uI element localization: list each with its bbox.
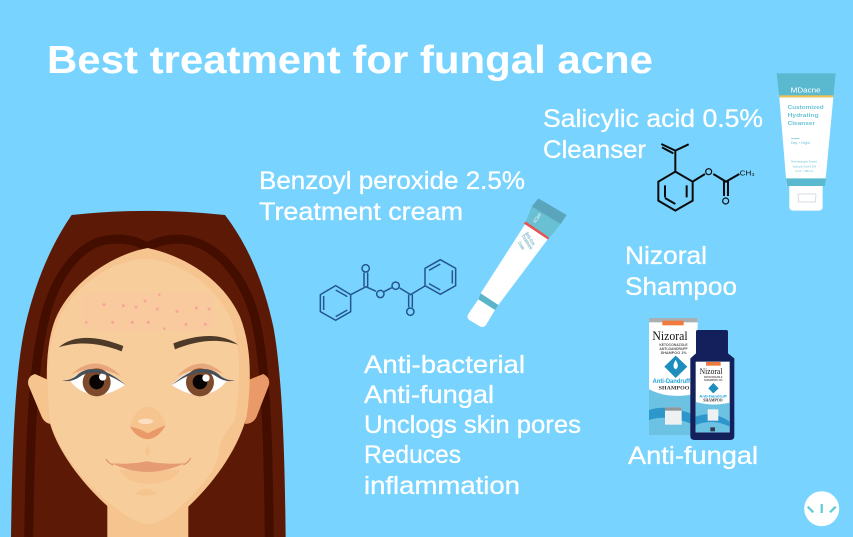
product: benzoyl peroxide cream tube (467, 198, 567, 327)
title: Best treatment for fungal acne (47, 39, 653, 82)
eye: right (172, 363, 235, 396)
shampoo bottle: SHAMPOO (703, 398, 723, 402)
shampoo box: SHAMPOO 1% (661, 351, 687, 355)
eye: left (62, 363, 126, 396)
molecule: benzoyl peroxide (320, 260, 456, 320)
logo badge (804, 491, 839, 526)
heading: nizoral shampoo (625, 242, 737, 301)
shampoo box: SHAMPOO (659, 385, 690, 391)
heading: benzoyl peroxide: Benzoyl peroxide 2.5% (259, 167, 525, 195)
molecule: salicylic acid: CH₃ (740, 169, 755, 178)
product: MDacne cleanser tube: Hydrating (788, 113, 819, 119)
eyebrow: left (59, 338, 123, 351)
heading: nizoral shampoo: Shampoo (625, 273, 737, 301)
benefits list: benzoyl peroxide: Anti-fungal (364, 381, 494, 409)
neck (107, 500, 188, 537)
benefits list: benzoyl peroxide (364, 351, 581, 500)
illustration: woman's face with forehead acne (11, 211, 286, 537)
product: MDacne cleanser tube: Dermatologist Tested (791, 160, 817, 164)
shampoo bottle: Nizoral (700, 367, 723, 376)
product: benzoyl peroxide cream tube: XCare (532, 212, 543, 224)
heading: salicylic acid: Cleanser (543, 136, 646, 164)
shampoo box (649, 318, 698, 435)
eyebrow: right (173, 336, 238, 349)
benefits list: benzoyl peroxide: Unclogs skin pores (364, 411, 581, 439)
shampoo bottle: Anti-Dandruff (699, 393, 727, 398)
shampoo bottle (690, 330, 734, 440)
product: MDacne cleanser tube: Day + Night (791, 141, 810, 145)
heading: salicylic acid (543, 105, 763, 164)
heading: benzoyl peroxide: Treatment cream (259, 198, 463, 226)
product: benzoyl peroxide cream tube: Cream (516, 241, 526, 251)
benefits list: benzoyl peroxide: Anti-bacterial (364, 351, 525, 379)
face (47, 248, 250, 528)
shampoo box: ANTI-DANDRUFF (659, 347, 688, 351)
product: MDacne cleanser tube (777, 73, 836, 211)
product: MDacne cleanser tube: Salicylic Acid 0.5% (793, 164, 816, 168)
heading: salicylic acid: Salicylic acid 0.5% (543, 105, 763, 133)
hair (11, 211, 286, 537)
product: benzoyl peroxide cream tube: Treatment (520, 234, 534, 251)
product: MDacne cleanser tube: MDacne (791, 87, 821, 94)
shampoo box: Nizoral (652, 329, 688, 343)
product: Nizoral box and bottle (649, 318, 734, 440)
benefits list: benzoyl peroxide: inflammation (364, 472, 520, 500)
heading: benzoyl peroxide (259, 167, 525, 226)
ear: right (245, 374, 269, 424)
acne patch (83, 293, 213, 331)
heading: nizoral shampoo: Nizoral (625, 242, 707, 270)
product: MDacne cleanser tube: Customized (788, 105, 824, 111)
benefits list: benzoyl peroxide: Reduces (364, 441, 461, 469)
benefit: nizoral: Anti-fungal (628, 442, 758, 470)
shampoo box: KETOCONAZOLE (659, 343, 688, 347)
product: MDacne cleanser tube: Cleanser (788, 121, 816, 127)
mouth (106, 458, 191, 496)
molecule: salicylic acid (658, 144, 755, 211)
product: MDacne cleanser tube: 6 Oz. / 180 mL (795, 169, 814, 173)
ear: left (28, 374, 52, 424)
product: benzoyl peroxide cream tube: Body Acne (523, 231, 536, 247)
shampoo bottle: KETOCONAZOLE (704, 376, 723, 379)
shampoo box: Anti-Dandruff (653, 378, 691, 385)
nose (130, 407, 166, 456)
shampoo bottle: SHAMPOO 1% (704, 379, 723, 382)
